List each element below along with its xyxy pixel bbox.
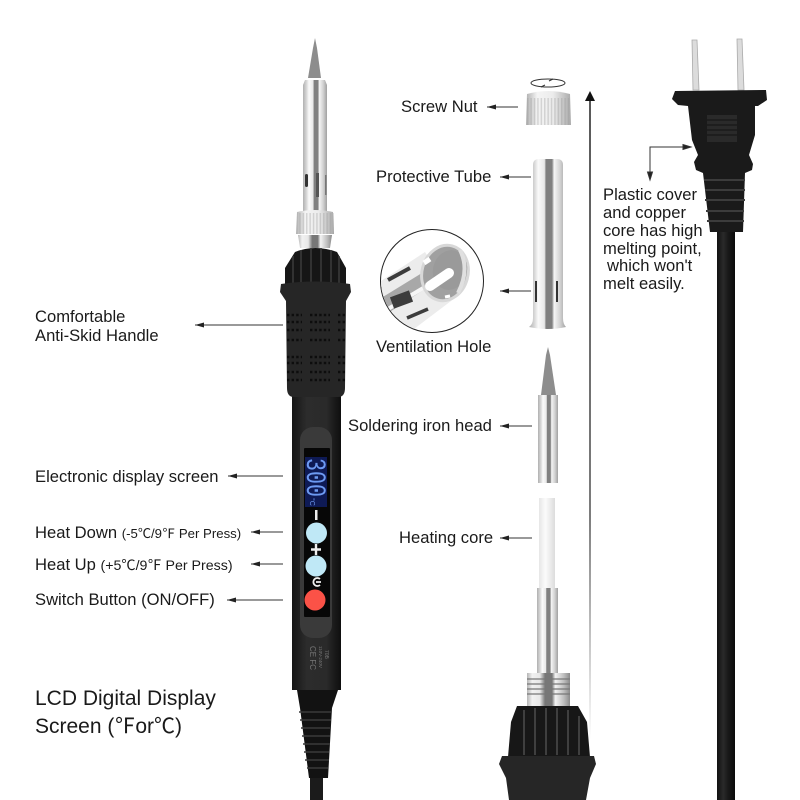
screw nut (526, 91, 571, 125)
plug callout text: core has high (603, 221, 703, 240)
lcd display: 300 (298, 458, 329, 497)
minus symbol (315, 510, 318, 520)
anti-skid grip (280, 282, 351, 397)
handle collar ribs (524, 708, 579, 755)
power symbol (313, 578, 321, 586)
protective tube (529, 159, 566, 329)
model marking (308, 646, 329, 670)
barrel (292, 390, 341, 690)
plug callout text: which won't (606, 256, 693, 275)
plug callout text (603, 185, 703, 293)
plug callout text: melting point, (603, 239, 702, 258)
tube slots (388, 268, 410, 280)
heat down button (306, 522, 327, 544)
plug prongs (692, 39, 744, 90)
tube body (381, 252, 452, 329)
heating core metal sleeve (537, 588, 558, 674)
ventilation hole label: Ventilation Hole (376, 337, 491, 356)
soldering iron assembled (280, 38, 351, 800)
lcd heading: Screen (℉or℃) (35, 715, 182, 738)
lcd heading: LCD Digital Display (35, 687, 216, 710)
plug grip recess (707, 115, 737, 142)
switch button (304, 590, 326, 610)
plus symbol (311, 544, 321, 555)
handle flange and grip (499, 756, 596, 800)
tube opening (420, 244, 470, 302)
lcd display: °C (308, 498, 316, 506)
control panel recess (300, 427, 332, 638)
handle label (35, 307, 283, 345)
heating core label: Heating core (399, 528, 493, 547)
switch label: Switch Button (ON/OFF) (35, 590, 215, 609)
plug callout text: and copper (603, 203, 687, 222)
plug body (672, 90, 767, 232)
plug callout text: melt easily. (603, 274, 685, 293)
display label: Electronic display screen (35, 467, 219, 486)
soldering iron head (538, 347, 558, 483)
soldering iron head label: Soldering iron head (348, 416, 492, 435)
icon: rotation ellipse (531, 79, 565, 87)
heat up label: Heat Up (+5℃/9℉ Per Press) (35, 555, 233, 574)
cable (310, 775, 323, 800)
model marking: CE FC (308, 646, 317, 670)
iron barrel tube (303, 80, 327, 211)
control panel (304, 448, 330, 617)
handle label: Comfortable (35, 307, 125, 326)
anti-skid texture (287, 315, 345, 380)
collar ribs (293, 248, 339, 284)
power plug (603, 39, 767, 800)
protective tube label: Protective Tube (376, 167, 491, 186)
assembly direction arrow (585, 91, 595, 740)
plug callout arrow (648, 144, 691, 180)
heat up button (306, 556, 326, 576)
threaded base (527, 673, 570, 706)
handle label: Anti-Skid Handle (35, 326, 159, 345)
left labels (35, 307, 283, 609)
screw nut label (401, 97, 518, 116)
plug callout text: Plastic cover (603, 185, 698, 204)
lcd heading (35, 687, 216, 738)
plug strain ribs (704, 180, 745, 221)
heat down label: Heat Down (-5℃/9℉ Per Press) (35, 523, 241, 542)
screw nut label: Screw Nut (401, 97, 478, 116)
knurled nut (296, 210, 334, 248)
exploded parts (348, 79, 596, 800)
model marking: 110V-240V (318, 646, 323, 668)
handle collar (508, 706, 590, 757)
ventilation hole magnifier (375, 230, 484, 332)
iron tip (308, 38, 321, 78)
ventilation hole arrow (500, 290, 531, 292)
grip collar (285, 248, 346, 285)
heating core (539, 498, 555, 588)
strain relief (297, 690, 338, 778)
power cable (717, 230, 735, 800)
model marking: 70B (323, 650, 329, 660)
